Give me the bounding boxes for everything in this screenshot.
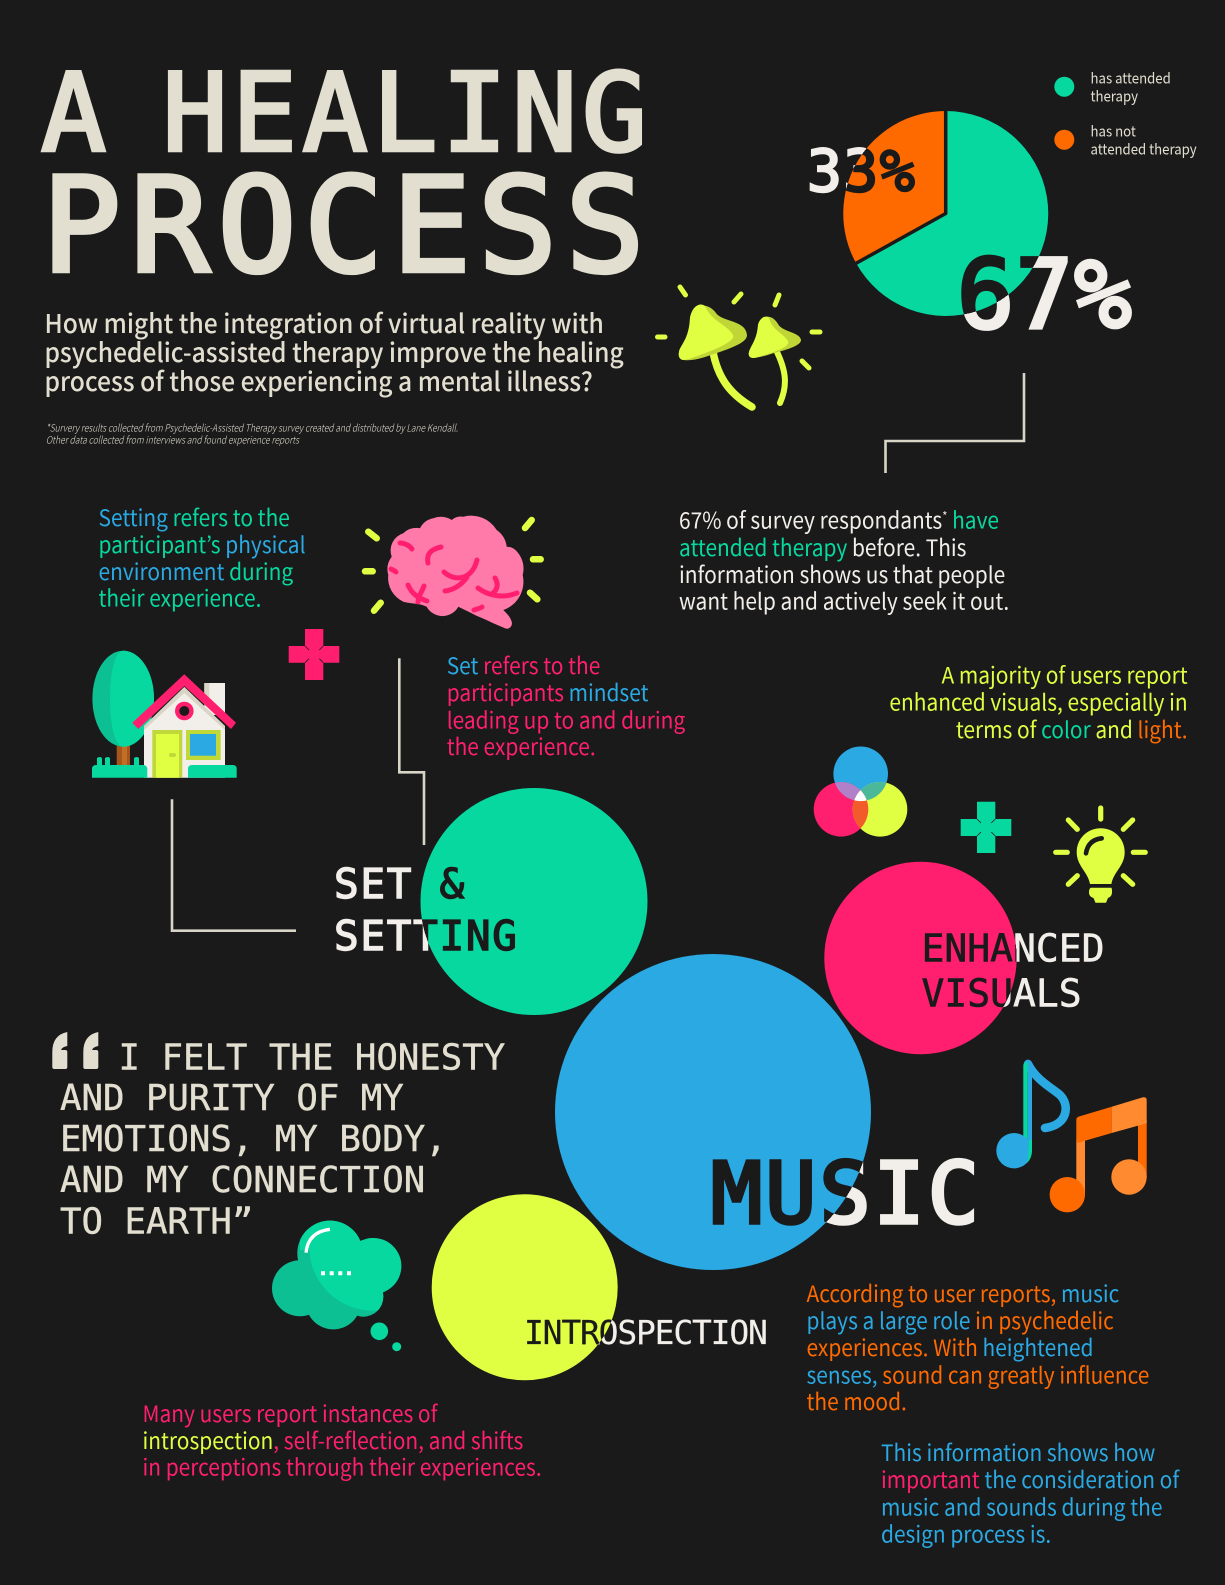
text: music finding bbox=[806, 1277, 1149, 1417]
quote text: EMOTIONS, MY BODY, bbox=[60, 1119, 447, 1160]
text: design implication bbox=[881, 1436, 1180, 1550]
title: A HEALING bbox=[41, 52, 647, 177]
title: PROCESS bbox=[42, 149, 644, 302]
label: introspection: INTROSPECTION bbox=[524, 1313, 767, 1352]
icon: brain bbox=[365, 516, 541, 629]
text: introspection finding: introspection, self-reflection, and shifts bbox=[142, 1424, 523, 1456]
icon: thought cloud bbox=[272, 1221, 401, 1351]
text: setting definition: environment during bbox=[98, 555, 293, 587]
text: therapy finding bbox=[679, 504, 1009, 617]
text: design implication: music and sounds during the bbox=[881, 1491, 1162, 1523]
connector: house to set and setting bbox=[172, 799, 296, 931]
quote text: TO EARTH” bbox=[60, 1202, 253, 1242]
footnote: *Survery results collected from Psychedelic-Assisted Therapy survey created and distributed by Lane Kendall. bbox=[46, 420, 458, 435]
orange notes bbox=[1050, 1097, 1147, 1212]
label: set and setting: SET & bbox=[334, 860, 466, 908]
window bbox=[186, 730, 221, 760]
stat: 33%: 33% bbox=[807, 137, 916, 205]
icon: mushrooms bbox=[658, 287, 820, 407]
label: enhanced visuals bbox=[922, 927, 1105, 1016]
connector: brain to set and setting bbox=[399, 658, 424, 845]
circle: enhanced visuals bbox=[824, 862, 1017, 1054]
text: music finding: experiences. With heightened bbox=[806, 1331, 1094, 1363]
icon: green plus bbox=[961, 802, 1011, 853]
icon: music notes bbox=[996, 1062, 1147, 1212]
quote text bbox=[60, 1037, 505, 1242]
pie slice: has attended therapy 67% bbox=[856, 111, 1048, 316]
legend labels: has attended bbox=[1090, 68, 1171, 89]
house body bbox=[144, 687, 225, 778]
legend marker: has not attended bbox=[1054, 130, 1074, 150]
label: music: MUSIC bbox=[711, 1145, 982, 1244]
research question bbox=[44, 304, 624, 399]
label: set and setting: SETTING bbox=[334, 912, 519, 960]
text: music finding: plays a large role in psychedelic bbox=[806, 1304, 1114, 1336]
text: introspection finding: in perceptions through their experiences. bbox=[142, 1451, 542, 1483]
footnote bbox=[46, 420, 458, 447]
pie chart bbox=[843, 108, 1048, 316]
icon: pink plus bbox=[289, 629, 339, 680]
text: music finding: According to user reports, music bbox=[806, 1277, 1119, 1309]
text: enhanced visuals finding: A majority of users report bbox=[941, 659, 1188, 691]
research question: process of those experiencing a mental illness? bbox=[44, 362, 593, 399]
label: enhanced visuals: ENHANCED bbox=[922, 927, 1105, 971]
door bbox=[152, 730, 182, 778]
legend labels: therapy bbox=[1090, 86, 1139, 107]
legend labels: has not bbox=[1090, 121, 1137, 142]
circle: music bbox=[555, 954, 871, 1270]
connector: pie chart to therapy text bbox=[886, 373, 1024, 473]
text: set definition: the experience. bbox=[447, 730, 596, 762]
text: music finding: senses, sound can greatly influence bbox=[806, 1359, 1149, 1391]
stat: 67%: 67% bbox=[957, 240, 1133, 350]
research question: How might the integration of virtual reality with bbox=[44, 304, 604, 341]
text: setting definition: their experience. bbox=[98, 582, 261, 614]
text: set definition: leading up to and during bbox=[447, 703, 685, 736]
text: introspection finding: Many users report instances of bbox=[142, 1397, 438, 1429]
tree bbox=[92, 651, 154, 766]
text: design implication: This information shows how bbox=[881, 1436, 1155, 1468]
round window bbox=[175, 702, 194, 720]
text: set definition: Set refers to the bbox=[447, 649, 600, 681]
icon: opening quote mark bbox=[52, 1032, 98, 1069]
text: therapy finding: information shows us that people bbox=[679, 558, 1005, 590]
text: set definition: participants mindset bbox=[447, 676, 648, 708]
footnote: Other data collected from interviews and found experience reports bbox=[46, 432, 300, 447]
grass bbox=[92, 757, 147, 778]
legend labels bbox=[1090, 68, 1197, 160]
text: setting definition: participant’s physical bbox=[98, 528, 306, 560]
text: setting definition bbox=[98, 501, 306, 614]
pie slice: has not attended therapy 33% bbox=[843, 111, 946, 263]
text: therapy finding: want help and actively seek it out. bbox=[679, 585, 1009, 617]
text: music finding: the mood. bbox=[806, 1385, 907, 1417]
text: therapy finding: have bbox=[952, 504, 999, 536]
icon: house and tree bbox=[92, 651, 237, 778]
text: introspection finding bbox=[142, 1397, 542, 1483]
text: set definition bbox=[447, 649, 685, 762]
roof bbox=[132, 674, 236, 729]
legend bbox=[1054, 68, 1197, 160]
blue note bbox=[996, 1062, 1066, 1168]
quote text: AND MY CONNECTION bbox=[60, 1160, 425, 1201]
quote text: AND PURITY OF MY bbox=[60, 1078, 404, 1119]
legend labels: attended therapy bbox=[1090, 139, 1197, 160]
circle: introspection bbox=[432, 1194, 618, 1380]
text: therapy finding: attended therapy before. This bbox=[679, 531, 966, 563]
legend marker: has attended bbox=[1054, 77, 1074, 97]
icon: light bulb bbox=[1056, 808, 1145, 903]
text: therapy finding: * bbox=[942, 508, 947, 525]
text: design implication: important the consideration of bbox=[881, 1463, 1180, 1495]
text: setting definition: Setting refers to the bbox=[98, 501, 290, 533]
text: enhanced visuals finding: terms of color and light. bbox=[956, 713, 1188, 745]
pie divider bbox=[853, 108, 946, 265]
label: enhanced visuals: VISUALS bbox=[922, 972, 1082, 1016]
text: enhanced visuals finding bbox=[889, 659, 1188, 745]
title bbox=[41, 52, 647, 302]
text: enhanced visuals finding: enhanced visuals, especially in bbox=[889, 686, 1188, 718]
text: therapy finding: 67% of survey respondants bbox=[679, 504, 942, 536]
circle: set and setting bbox=[420, 788, 648, 1015]
chimney bbox=[204, 683, 225, 715]
label: set and setting bbox=[334, 860, 519, 960]
research question: psychedelic-assisted therapy improve the healing bbox=[44, 333, 624, 370]
text: design implication: design process is. bbox=[881, 1518, 1051, 1550]
quote text: I FELT THE HONESTY bbox=[118, 1037, 505, 1078]
icon: colour venn diagram bbox=[814, 746, 907, 837]
